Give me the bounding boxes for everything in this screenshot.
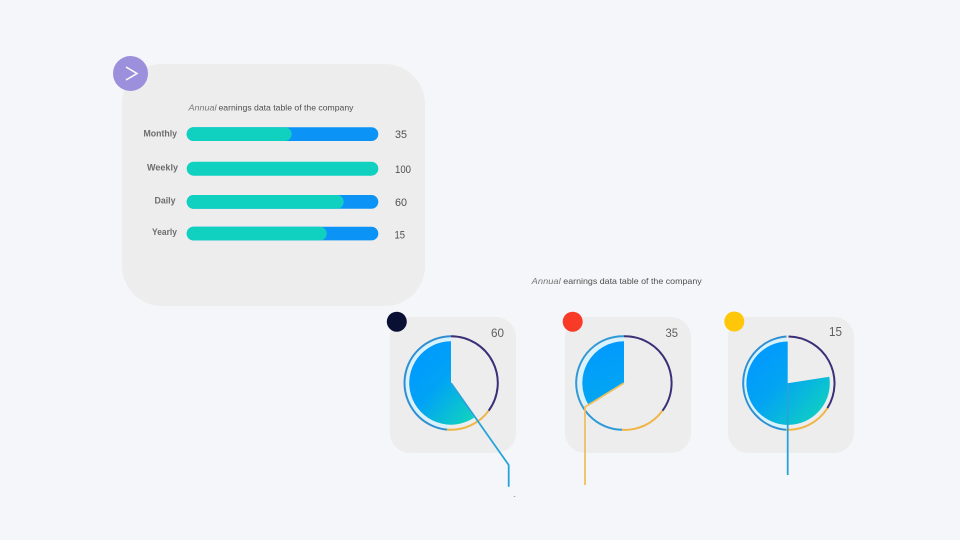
card background <box>565 317 691 453</box>
icon: purple chevron badge <box>113 56 148 91</box>
bar row: Weekly 100: 100 <box>395 164 411 176</box>
status dot: red <box>563 312 583 332</box>
value: 35: 35 <box>666 328 678 340</box>
bar row: Weekly 100 <box>147 162 411 176</box>
bar row: Yearly 15 <box>152 227 405 242</box>
bar row: Monthly 35: Monthly <box>144 129 177 139</box>
bar row: Daily 60: 60 <box>395 197 407 209</box>
panel: pie card 35 <box>563 312 691 485</box>
bar row: Yearly 15: Yearly <box>152 227 177 237</box>
heading: pie charts title: earnings data table of the company <box>563 276 702 286</box>
pie slice <box>409 341 474 425</box>
heading: pie charts title: Annual <box>531 276 562 286</box>
panel: bar chart card <box>113 56 425 306</box>
value: 60: 60 <box>491 328 504 340</box>
status dot: navy <box>387 312 407 332</box>
leader line <box>451 383 509 487</box>
panel: pie card 60 <box>387 312 516 500</box>
value: 15: 15 <box>829 324 842 339</box>
panel: pie card 15 <box>724 312 854 475</box>
leader line <box>787 383 789 475</box>
pie slice <box>582 341 624 405</box>
bar row: Daily 60: Daily <box>154 196 176 206</box>
bar row: Yearly 15: 15 <box>394 230 405 242</box>
card background <box>390 317 516 453</box>
bar row: Weekly 100: Weekly <box>147 163 178 173</box>
pie slice <box>746 342 830 425</box>
heading: bar chart title: earnings data table of the company <box>218 103 354 113</box>
card background <box>728 317 854 453</box>
leader line <box>585 383 624 485</box>
status dot: yellow <box>724 312 744 332</box>
heading: bar chart title: Annual <box>187 103 218 113</box>
tiny mark: - <box>514 494 516 500</box>
progress ring <box>743 336 835 430</box>
bar row: Daily 60 <box>154 195 407 209</box>
bar row: Monthly 35 <box>144 127 407 141</box>
panel background <box>122 64 425 306</box>
progress ring <box>405 336 498 430</box>
progress ring <box>576 336 672 430</box>
bar row: Monthly 35: 35 <box>395 129 407 141</box>
